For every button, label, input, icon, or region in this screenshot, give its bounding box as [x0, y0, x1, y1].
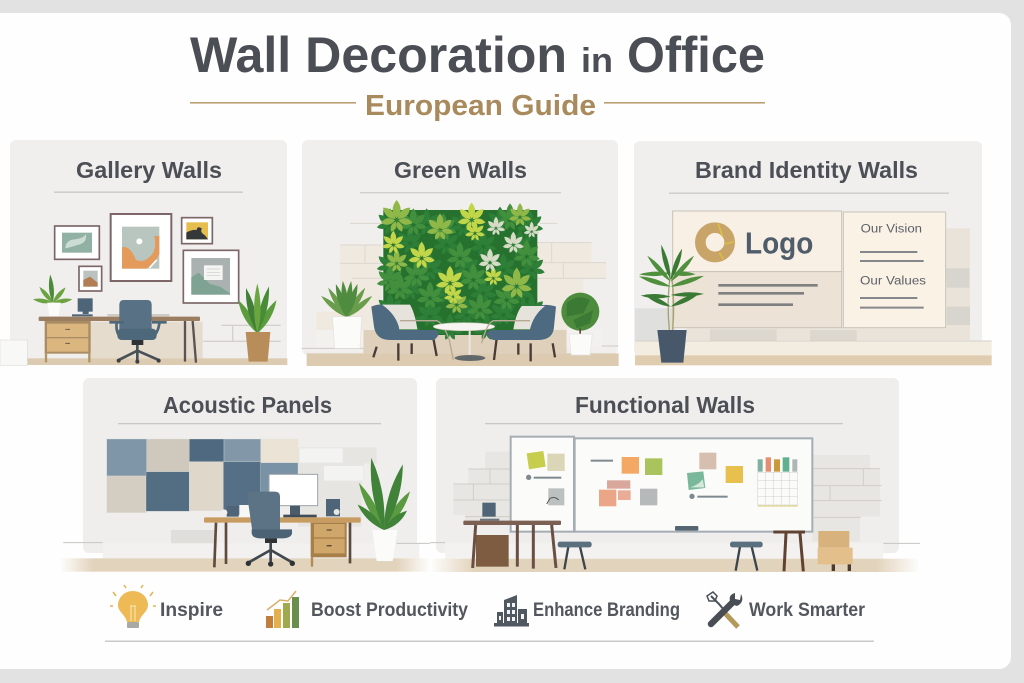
frame 5 [183, 250, 239, 303]
footer: work smarter: Work Smarter [749, 600, 866, 621]
panel: brand identity walls [634, 141, 992, 365]
left stool [558, 542, 592, 569]
brand scene [635, 211, 992, 365]
cardboard box seat [818, 531, 853, 571]
frame 2 [111, 214, 171, 281]
icon: crossed tools [707, 592, 742, 627]
green scene [302, 200, 619, 366]
desk items [221, 499, 340, 517]
title: in [581, 42, 613, 80]
monitor [72, 298, 93, 316]
desk [39, 317, 200, 363]
acoustic scene [60, 439, 430, 572]
footer: inspire: Inspire [160, 599, 223, 621]
icon: light bulb [110, 585, 156, 628]
gallery scene [0, 214, 287, 365]
vision and values board: Our Values [860, 273, 926, 287]
footer: enhance branding [494, 595, 680, 626]
left chair [371, 304, 453, 361]
footer: enhance branding: Enhance Branding [533, 600, 680, 621]
heading: green walls: Green Walls [394, 157, 527, 183]
right topiary [561, 293, 599, 355]
heading: acoustic panels: Acoustic Panels [163, 392, 332, 418]
chair [109, 300, 167, 364]
footer: inspire [110, 585, 223, 628]
potted plant [638, 244, 705, 363]
chair [246, 492, 295, 567]
left plant [33, 274, 73, 316]
logo mark [700, 224, 734, 259]
panel: green walls [302, 140, 619, 366]
table [433, 323, 495, 361]
potted plant [355, 457, 413, 561]
logo wordmark: Logo [745, 226, 813, 260]
living wall [376, 200, 545, 341]
panel: acoustic panels [60, 378, 430, 572]
title: Office [627, 27, 765, 83]
frame 3 [182, 218, 212, 244]
footer: boost productivity [266, 591, 468, 628]
heading: functional walls: Functional Walls [575, 392, 755, 418]
logo board [673, 211, 842, 328]
monitor [269, 474, 318, 517]
footer: boost productivity: Boost Productivity [311, 600, 468, 621]
left pinboard [511, 437, 574, 532]
left potted plant [319, 281, 374, 348]
main whiteboard [575, 438, 812, 532]
calendar [758, 457, 798, 506]
vision and values board: Our Vision [861, 222, 922, 236]
right plant [235, 283, 279, 362]
frame 4 [79, 266, 102, 291]
desk [204, 517, 361, 567]
functional scene [430, 437, 920, 572]
subtitle: European Guide [365, 90, 596, 122]
table with box [463, 503, 561, 569]
title [190, 27, 765, 83]
right chair [482, 305, 556, 361]
heading: gallery walls: Gallery Walls [76, 157, 222, 183]
panel: gallery walls [0, 140, 287, 365]
title: Wall Decoration [190, 27, 567, 83]
easel legs [773, 532, 805, 571]
right stool [730, 542, 763, 571]
frame 1 [55, 226, 99, 259]
heading: brand identity walls: Brand Identity Walls [695, 157, 918, 183]
icon: buildings [494, 595, 529, 626]
vision and values board [843, 212, 946, 328]
acoustic tile wall [107, 439, 298, 515]
footer: work smarter [707, 592, 866, 627]
icon: bar chart with arrow [266, 591, 299, 628]
panel: functional walls [430, 378, 920, 572]
